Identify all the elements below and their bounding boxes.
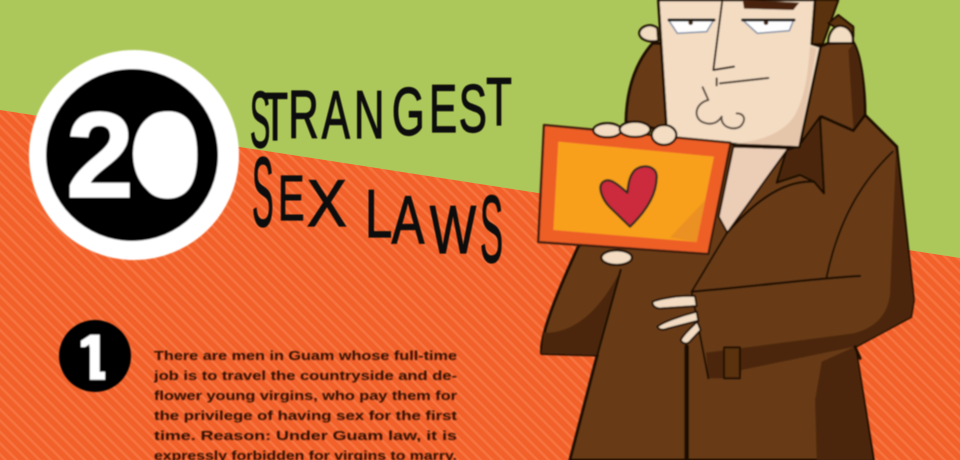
text block: law 1: There are men in Guam whose full-time bbox=[154, 348, 457, 363]
card: corner shade bbox=[670, 200, 705, 242]
ear: left bbox=[639, 25, 658, 41]
eye: left bbox=[669, 20, 714, 33]
coat: lapel shadow bbox=[777, 117, 824, 193]
hair bbox=[812, 0, 838, 44]
badge: number 1: 1 bbox=[75, 323, 111, 393]
text block: law 1: time. Reason: Under Guam law, it is bbox=[154, 428, 457, 443]
badge: number 1 bbox=[59, 320, 131, 393]
coat: lower body shading bbox=[815, 347, 873, 460]
coat: seams and folds bbox=[597, 152, 893, 460]
coat: body and sleeves bbox=[542, 115, 913, 460]
face bbox=[658, 0, 821, 147]
illustration: man in trench coat bbox=[538, 0, 913, 460]
face shading bbox=[733, 47, 817, 146]
hand bbox=[653, 296, 701, 343]
text block: law 1: job is to travel the countryside and de- bbox=[153, 368, 457, 383]
coat: left sleeve shading bbox=[542, 270, 621, 355]
title line: Strangest: TRANGEST bbox=[262, 64, 512, 154]
card: border bbox=[538, 125, 731, 254]
nose bbox=[713, 0, 734, 70]
coat: sleeve shading bbox=[706, 150, 913, 378]
title line: Strangest: S bbox=[250, 74, 270, 164]
coat: right collar bbox=[799, 43, 865, 147]
badge: number 20: 20 bbox=[66, 87, 202, 223]
text block: law 1: flower young virgins, who pay them for bbox=[154, 388, 457, 403]
title bbox=[250, 64, 512, 283]
eyebrow bbox=[743, 0, 799, 10]
title line: Sex Laws: S bbox=[252, 139, 274, 247]
coat: right collar shade bbox=[848, 44, 864, 128]
card: panel bbox=[553, 142, 714, 242]
ear: right bbox=[828, 26, 853, 43]
eye: right bbox=[743, 20, 794, 33]
icon: heart bbox=[600, 166, 657, 227]
text block: law 1: the privilege of having sex for the first bbox=[154, 408, 458, 423]
neck bbox=[719, 147, 788, 233]
title line: Sex Laws: E bbox=[278, 164, 304, 234]
card bbox=[538, 125, 731, 254]
title line: Sex Laws: S bbox=[480, 177, 503, 283]
title line: Sex Laws: X bbox=[307, 167, 347, 241]
chin curl bbox=[697, 87, 744, 128]
background: striped orange diagonal bbox=[0, 110, 960, 460]
title line: Sex Laws: LAW bbox=[365, 175, 476, 268]
mouth bbox=[717, 78, 768, 85]
hair behind ear bbox=[828, 15, 853, 37]
badge: number 20 bbox=[29, 50, 239, 260]
coat: left collar bbox=[626, 43, 668, 132]
fingers on card bbox=[593, 122, 676, 265]
text block: law 1 bbox=[153, 348, 458, 460]
coat: belt strap bbox=[724, 347, 740, 378]
title line: Sex Laws bbox=[252, 139, 503, 283]
